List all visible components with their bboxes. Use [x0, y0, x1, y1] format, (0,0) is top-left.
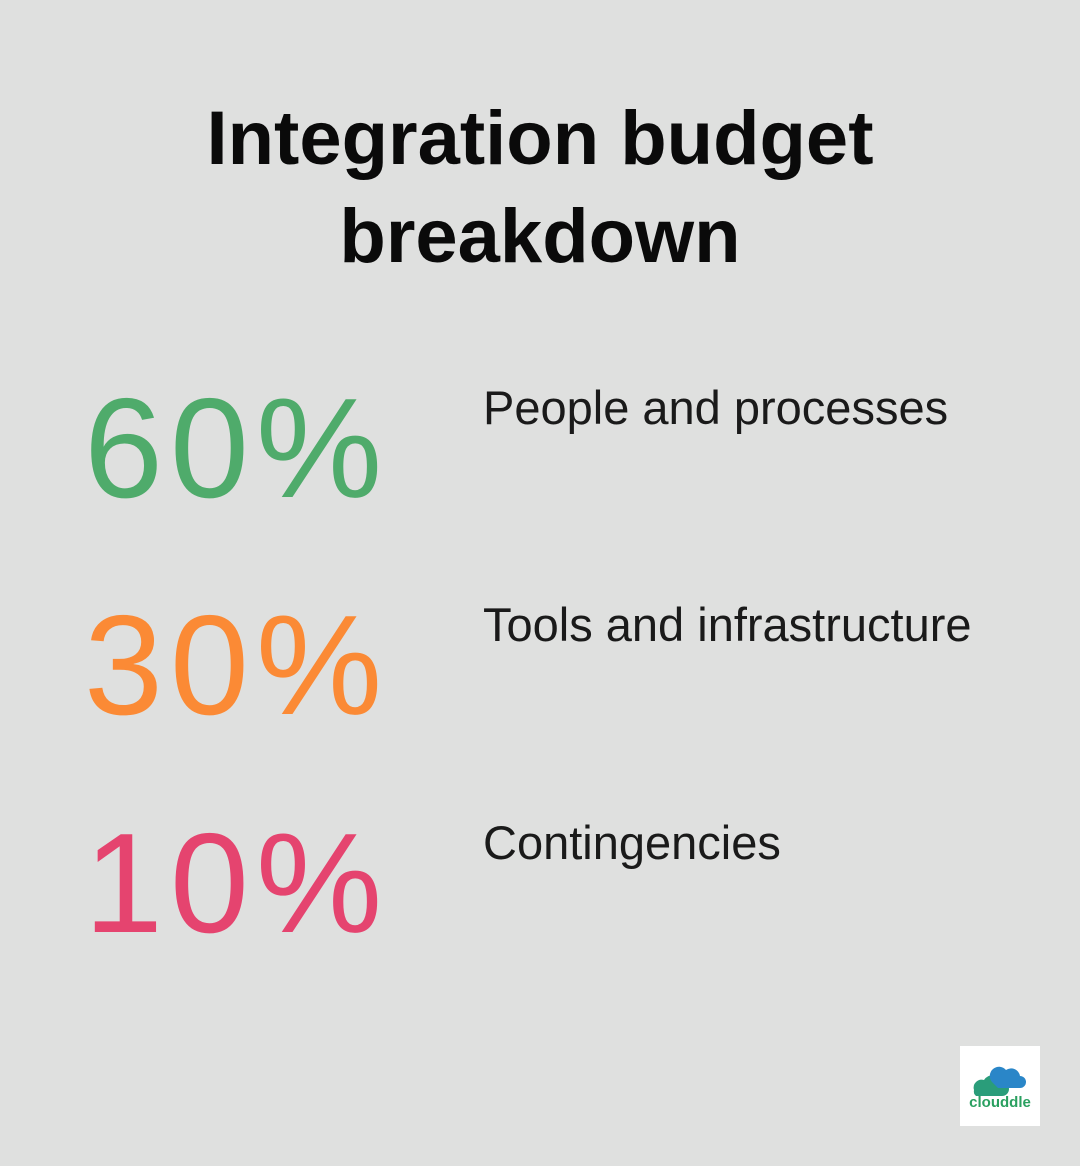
label: contingencies: Contingencies [483, 816, 781, 869]
stat: 10%: 10% [84, 804, 389, 963]
title: Integration budget [206, 96, 874, 181]
title: breakdown [339, 194, 741, 279]
label: people: People and processes [483, 381, 948, 434]
logo [960, 1046, 1040, 1126]
title [206, 96, 874, 279]
label: tools: Tools and infrastructure [483, 598, 972, 651]
stat: 30%: 30% [84, 586, 389, 745]
logo: clouddle [969, 1094, 1031, 1111]
stat: 60%: 60% [84, 369, 389, 528]
